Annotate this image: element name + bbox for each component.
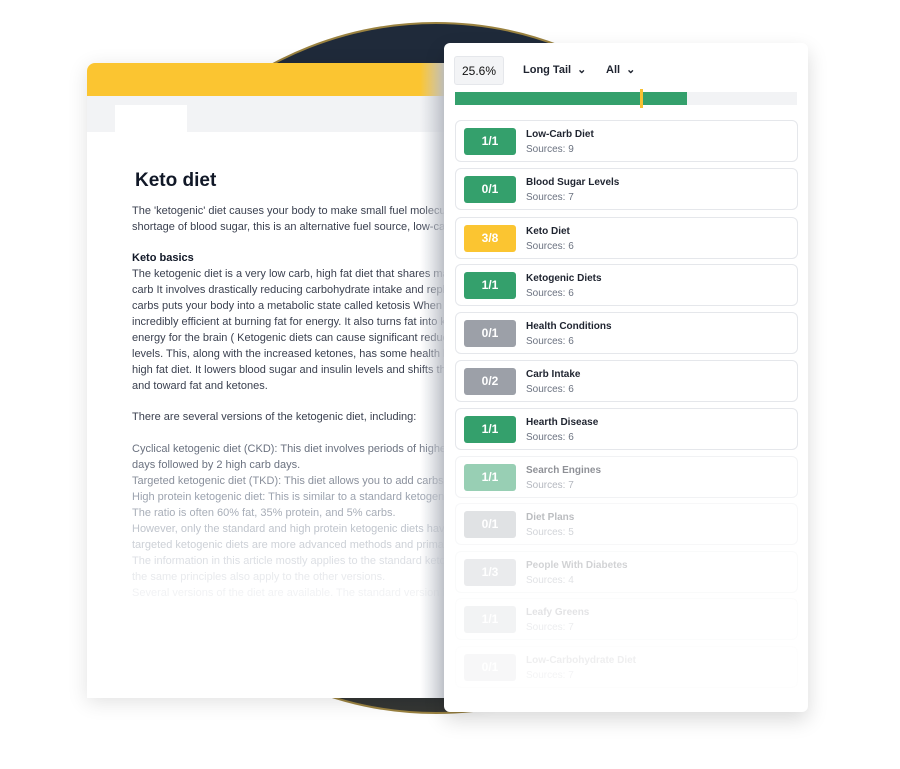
yellow header bar — [87, 63, 487, 96]
keyword rows: Sources: 6 — [526, 288, 574, 299]
background circle — [90, 22, 782, 714]
keyword rows: Sources: 7 — [526, 480, 574, 491]
article text: There are several versions of the ketogenic diet, including: — [132, 411, 416, 423]
panel: article document — [87, 63, 487, 698]
keyword rows: 0/1 — [482, 660, 498, 674]
article text: the same principles also apply to the other versions. — [132, 571, 385, 583]
article text: and toward fat and ketones. — [132, 380, 268, 392]
keyword rows: Keto Diet — [526, 226, 570, 237]
keyword rows: Sources: 6 — [526, 384, 574, 395]
keyword rows: Sources: 6 — [526, 432, 574, 443]
keyword rows: 3/8 — [482, 231, 498, 245]
article text: high fat diet. It lowers blood sugar and insulin levels and shifts the — [132, 364, 444, 376]
article text — [132, 63, 444, 698]
keyword rows: Sources: 7 — [526, 670, 574, 681]
keyword rows: 1/1 — [482, 134, 498, 148]
keyword rows: Health Conditions — [526, 321, 612, 332]
keyword rows: Sources: 6 — [526, 241, 574, 252]
keyword rows: Sources: 6 — [526, 336, 574, 347]
heading: Keto diet — [135, 170, 216, 191]
article text: Several versions of the diet are available. The standard version is — [132, 587, 444, 599]
grey tab bar — [87, 96, 487, 132]
shadow fade near right card — [420, 63, 444, 698]
article text: Keto basics — [132, 252, 194, 264]
keyword rows: 0/1 — [482, 182, 498, 196]
keyword rows: Blood Sugar Levels — [526, 177, 619, 188]
keyword rows: 1/1 — [482, 422, 498, 436]
keyword rows: Hearth Disease — [526, 417, 598, 428]
keyword rows: 1/1 — [482, 278, 498, 292]
keyword rows: 1/1 — [482, 612, 498, 626]
score box — [454, 56, 504, 85]
keyword rows: People With Diabetes — [526, 560, 628, 571]
keyword rows: Ketogenic Diets — [526, 273, 602, 284]
dropdown: all: All ⌄ — [606, 64, 635, 76]
keyword rows: 1/1 — [482, 470, 498, 484]
keyword rows: Sources: 7 — [526, 192, 574, 203]
dropdown: long tail: Long Tail ⌄ — [523, 64, 586, 76]
keyword rows: Diet Plans — [526, 512, 574, 523]
keyword rows: Low-Carb Diet — [526, 129, 594, 140]
keyword rows: 0/1 — [482, 326, 498, 340]
keyword rows: Search Engines — [526, 465, 601, 476]
keyword rows: 0/1 — [482, 517, 498, 531]
keyword rows: Sources: 9 — [526, 144, 574, 155]
score box: 25.6% — [462, 64, 496, 78]
article text: The ratio is often 60% fat, 35% protein, and 5% carbs. — [132, 507, 396, 519]
keyword rows: Low-Carbohydrate Diet — [526, 655, 636, 666]
keyword rows: Sources: 5 — [526, 527, 574, 538]
keyword rows: Sources: 7 — [526, 622, 574, 633]
keyword rows: Sources: 4 — [526, 575, 574, 586]
article text: days followed by 2 high carb days. — [132, 459, 300, 471]
keyword rows: 0/2 — [482, 374, 498, 388]
keyword rows: Leafy Greens — [526, 607, 589, 618]
keyword rows: 1/3 — [482, 565, 498, 579]
keyword rows: Carb Intake — [526, 369, 580, 380]
progress bar — [455, 92, 797, 105]
panel: keyword list — [444, 43, 808, 712]
